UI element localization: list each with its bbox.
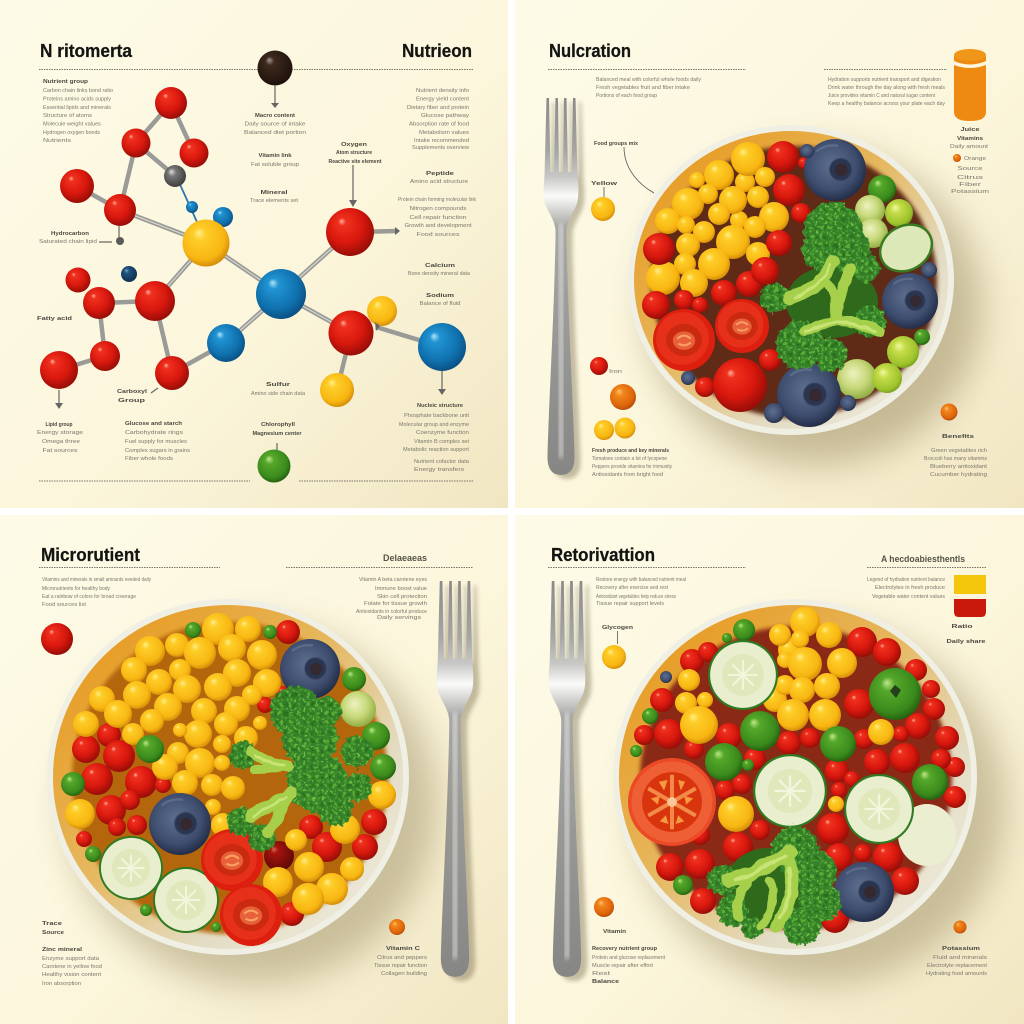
- text: top left: Micronutrients for healthy body: [42, 586, 110, 592]
- food: red tomatoes: [634, 627, 966, 933]
- text: jar labels: Citrus: [957, 175, 983, 181]
- text: top left block: Hydrogen oxygen bonds: [43, 130, 100, 136]
- text: bottom right: Electrolyte replacement: [927, 963, 987, 969]
- text: left labels: [37, 231, 148, 404]
- food: yellow peppers: [646, 142, 789, 297]
- icon: red ball: [41, 623, 73, 655]
- text: right middle labels: Balance of fluid: [420, 301, 460, 307]
- text: bottom right block: Molecular group and enzyme: [399, 422, 469, 428]
- food: tomato slice: [628, 758, 716, 846]
- title right: Nutrieon: [402, 41, 472, 61]
- text: jar labels: Fiber: [959, 182, 981, 188]
- text: right middle labels: Growth and development: [404, 223, 472, 229]
- text: bottom right block: [399, 403, 470, 473]
- text: bottom right: [924, 434, 988, 478]
- text: bottom right: Green vegetables rich: [931, 448, 987, 454]
- text: bottom left: Source: [42, 930, 64, 936]
- text: right column: Glucose pathway: [421, 113, 469, 119]
- text: right middle labels: Calcium: [425, 263, 455, 269]
- dividers: [39, 566, 473, 568]
- text: bottom left: Enzyme support data: [42, 956, 100, 962]
- text: bottom right: Tissue repair function: [374, 963, 427, 969]
- text: small labels: [591, 181, 622, 375]
- text: bottom left block: Omega three: [42, 439, 80, 445]
- food: broccoli: [227, 686, 373, 852]
- label with yellow ball: Glycogen: [602, 625, 634, 631]
- text: top right: Hydration supports nutrient transport and digestion: [828, 77, 941, 83]
- bowl: [613, 599, 1005, 985]
- dividers: [39, 70, 473, 481]
- food: broccoli: [760, 202, 886, 372]
- text: bottom right: Blueberry antioxidant: [930, 464, 988, 470]
- text: top right: Vitamin A beta carotene eyes: [359, 577, 427, 583]
- text: center labels: Mineral: [260, 190, 288, 196]
- text: bottom right block: Phosphate backbone unit: [404, 413, 469, 419]
- text: top right: Legend of hydration nutrient balance: [867, 577, 945, 583]
- text: small labels: Yellow: [591, 181, 618, 187]
- food: blueberries: [681, 139, 938, 427]
- text: top left: [42, 577, 151, 608]
- text: center labels: Reactive site element: [328, 159, 382, 165]
- text: top right: Antioxidants in colorful produce: [356, 609, 427, 615]
- text: bottom left: Muscle repair after effort: [592, 963, 653, 969]
- text: right middle labels: [398, 171, 476, 307]
- panel background: [515, 515, 1024, 1024]
- food: yellow peppers: [65, 613, 396, 915]
- text: bottom left: Trace: [42, 921, 62, 927]
- icon: fork: [437, 581, 480, 981]
- icon: orange jar: [954, 49, 986, 121]
- text: center labels: Vitamin link: [258, 153, 292, 159]
- text: top right: Vegetable water content values: [872, 594, 945, 600]
- text: top left block: Nutrient group: [43, 79, 89, 85]
- text: bottom right: Fluid and minerals: [933, 955, 987, 961]
- text: right column: Energy yield content: [416, 96, 469, 102]
- text: bottom left: Iron absorption: [42, 981, 81, 987]
- text: bottom right block: Energy transfers: [414, 467, 464, 473]
- text: top left block: Molecule weight values: [43, 122, 101, 128]
- text: small labels: Iron: [609, 369, 622, 375]
- food: green peas: [630, 619, 948, 895]
- text: right column: Supplements overview: [412, 145, 469, 151]
- food: pale slice: [898, 804, 956, 866]
- text: bottom middle block: [125, 421, 190, 462]
- panel background: [0, 0, 508, 508]
- text: right column: Dietary fiber and protein: [407, 105, 469, 111]
- arrows and leaders: [55, 85, 446, 450]
- text: bottom left: Vitamin: [603, 929, 627, 935]
- right heading: Delaeaeas: [383, 553, 427, 563]
- text: top left: [596, 77, 701, 99]
- small foods: loose balls: [590, 187, 958, 440]
- text: center labels: Daily source of intake: [244, 122, 306, 128]
- text: bottom left: [592, 448, 672, 478]
- text: top left block: Structure of atoms: [43, 113, 92, 119]
- molecule bonds: [59, 103, 442, 390]
- text: bottom right: [374, 946, 427, 977]
- legend swatches: [954, 575, 986, 617]
- text: center labels: Amino side chain data: [251, 391, 306, 397]
- dividers: [548, 68, 947, 70]
- panel: nutrition bowl: [515, 0, 1024, 508]
- text: bottom right block: Coenzyme function: [416, 430, 469, 436]
- text: top left: [596, 577, 686, 607]
- text: legend labels: Ratio: [952, 624, 973, 630]
- text: top right: Juice provides vitamin C and natural sugar content: [828, 93, 935, 99]
- text: bottom right block: Nutrient cofactor data: [414, 459, 470, 465]
- text: top left: Balanced meal with colorful whole foods daily: [596, 77, 701, 83]
- title: Microrutient: [41, 545, 140, 565]
- text: bottom left: Balance: [592, 979, 619, 985]
- text: jar labels: Potassium: [951, 189, 990, 195]
- text: top left: Recovery after exercise and rest: [596, 585, 668, 591]
- text: top left: Food sources list: [42, 602, 86, 608]
- text: top right: [828, 77, 945, 107]
- text: right column: Absorption rate of food: [409, 122, 469, 128]
- text: left labels: Carboxyl: [117, 389, 148, 395]
- text: center labels: [244, 113, 382, 437]
- text: bottom left block: [37, 422, 83, 454]
- text: bottom middle block: Fuel supply for muscles: [125, 439, 187, 445]
- text: top left: Eat a rainbow of colors for broad coverage: [42, 594, 136, 600]
- text: jar labels: Orange: [964, 156, 986, 162]
- text: bottom right: Potassium: [942, 946, 980, 952]
- molecule atoms: [40, 50, 466, 482]
- text: top left: Antioxidant vegetables help reduce stress: [596, 594, 676, 600]
- text: center labels: Trace elements set: [250, 198, 298, 204]
- text: jar labels: Juice: [960, 127, 980, 133]
- food: blueberries: [149, 639, 340, 855]
- text: right column: [407, 88, 469, 151]
- food: small blueberry: [660, 671, 672, 683]
- text: bottom middle block: Fiber whole foods: [125, 456, 173, 462]
- text: left labels: Group: [118, 398, 146, 404]
- text: right middle labels: Protein chain forming molecular link: [398, 197, 476, 203]
- icon: orange dot: [389, 919, 405, 935]
- food: sliced tomatoes: [201, 829, 282, 946]
- text: bottom right block: Nucleic structure: [417, 403, 463, 409]
- text: top right: Skin cell protection: [377, 594, 427, 600]
- right heading: A hecdoabiesthentls: [881, 554, 965, 564]
- text: bottom left: [592, 929, 665, 985]
- label and leader: Food groups mix: [594, 141, 639, 147]
- food: cucumber slices: [708, 640, 914, 844]
- text: top left block: [43, 79, 113, 144]
- dividers: [548, 566, 986, 568]
- title: Nulcration: [549, 41, 631, 61]
- text: top right: Immune boost value: [375, 586, 427, 592]
- food: green peas: [61, 622, 396, 932]
- text: bottom right: Citrus and peppers: [377, 955, 427, 961]
- text: bottom right block: Vitamin B complex set: [414, 439, 469, 445]
- text: top right: [867, 577, 945, 600]
- text: left labels: Fatty acid: [37, 316, 72, 322]
- food: pale pepper: [340, 691, 376, 727]
- food: broccoli: [707, 826, 841, 945]
- text: bottom left block: Lipid group: [46, 422, 73, 428]
- text: center labels: Magnesium center: [252, 431, 302, 437]
- text: top left block: Nutrients: [43, 138, 71, 144]
- food: red tomatoes: [72, 620, 387, 926]
- text: bottom left block: Fat sources: [42, 448, 78, 454]
- text: bottom left block: Energy storage: [37, 430, 83, 436]
- text: right middle labels: Sodium: [426, 293, 454, 299]
- text: bottom middle block: Glucose and starch: [125, 421, 183, 427]
- text: right middle labels: Bone density mineral data: [408, 271, 471, 277]
- text: right middle labels: Food sources: [416, 232, 460, 238]
- food: cucumber slices: [99, 836, 219, 933]
- title left: N ritomerta: [40, 41, 133, 61]
- text: top left block: Essential lipids and minerals: [43, 105, 111, 111]
- text: top right: Daily servings: [377, 615, 421, 621]
- text: top right: Drink water through the day along with fresh meals: [828, 85, 945, 91]
- text: bottom right: Hydrating food amounts: [926, 971, 987, 977]
- text: center labels: Sulfur: [266, 382, 291, 388]
- text: right middle labels: Amino acid structure: [410, 179, 468, 185]
- panel background: [515, 0, 1024, 508]
- text: top left: Vitamins and minerals in small amounts needed daily: [42, 577, 151, 583]
- food: yellow peppers: [675, 607, 894, 832]
- text: bottom right: Collagen building: [381, 971, 427, 977]
- text: top left: Tissue repair support levels: [596, 601, 664, 607]
- text: top right: Keep a healthy balance across your plate each day: [828, 101, 945, 107]
- food: dark cherry: [264, 841, 294, 871]
- text: jar labels: Vitamins: [957, 136, 983, 142]
- text: left labels: Hydrocarbon: [51, 231, 90, 237]
- text: center labels: Balanced diet portion: [244, 130, 306, 136]
- text: top left block: Carbon chain links bond ratio: [43, 88, 113, 94]
- panel: molecule diagram: [0, 0, 508, 508]
- text: top left: Portions of each food group: [596, 93, 657, 99]
- panel: restoration bowl: [515, 515, 1024, 1024]
- small foods: dots: [594, 897, 966, 934]
- food: pepper center: [890, 685, 901, 698]
- text: bottom left: Fresh produce and key minerals: [592, 448, 669, 454]
- label and leader: [594, 141, 654, 193]
- panel: micronutrient bowl: [0, 515, 508, 1024]
- text: bottom left: Protein and glucose replacement: [592, 955, 665, 961]
- text: left labels: Saturated chain lipid: [39, 239, 97, 245]
- text: jar labels: [950, 127, 990, 195]
- text: bottom left: Recovery nutrient group: [592, 946, 658, 952]
- text: bottom left: Zinc mineral: [42, 947, 83, 953]
- text: bottom left: Peppers provide vitamins for immunity: [592, 464, 672, 470]
- text: legend labels: Daily share: [946, 639, 986, 645]
- text: top left block: Proteins amino acids supply: [43, 96, 111, 102]
- text: bottom left: Antioxidants from bright food: [592, 472, 663, 478]
- text: right column: Nutrient density info: [416, 88, 469, 94]
- bowl: [628, 125, 982, 465]
- text: bottom right: Cucumber hydrating: [930, 472, 987, 478]
- food: blueberry: [834, 862, 894, 922]
- icon: fork: [549, 581, 592, 981]
- text: center labels: Fat soluble group: [251, 162, 299, 168]
- text: center labels: Oxygen: [341, 142, 368, 148]
- icon: orange dot: [953, 154, 961, 162]
- text: right middle labels: Peptide: [426, 171, 454, 177]
- text: bottom right block: Metabolic reaction support: [403, 447, 469, 453]
- text: bottom right: Broccoli has many vitamins: [924, 456, 987, 462]
- food: greens and cucumber: [837, 175, 940, 399]
- text: center labels: Atom structure: [336, 150, 372, 156]
- bowl: [47, 599, 437, 985]
- text: bottom left: Healthy vision content: [42, 972, 102, 978]
- text: right column: Metabolism values: [419, 130, 469, 136]
- text: center labels: Macro content: [255, 113, 295, 119]
- text: top left: Restore energy with balanced nutrient meal: [596, 577, 686, 583]
- text: top right: Electrolytes in fresh produce: [875, 585, 945, 591]
- text: top left: Fresh vegetables fruit and fiber intake: [596, 85, 690, 91]
- label with yellow ball: [602, 625, 634, 669]
- text: legend labels: [946, 624, 986, 645]
- text: bottom right: [926, 946, 987, 977]
- text: bottom left: Carotene in yellow food: [42, 964, 102, 970]
- food: red tomatoes: [642, 141, 811, 412]
- food: sliced tomatoes: [653, 299, 769, 371]
- text: right column: Intake recommended: [414, 138, 469, 144]
- text: bottom left: Rest: [592, 971, 611, 977]
- text: right middle labels: Nitrogen compounds: [410, 206, 467, 212]
- panel background: [0, 515, 508, 1024]
- text: center labels: Chlorophyll: [261, 422, 296, 428]
- text: right middle labels: Cell repair function: [410, 215, 466, 221]
- text: top right: Folate for tissue growth: [364, 601, 427, 607]
- text: bottom middle block: Carbohydrate rings: [125, 430, 183, 436]
- text: bottom left: [42, 921, 102, 987]
- text: bottom left: Tomatoes contain a lot of lycopene: [592, 456, 667, 462]
- text: jar labels: Daily amount: [950, 144, 989, 150]
- icon: fork: [544, 98, 584, 479]
- text: jar labels: Source: [958, 166, 982, 172]
- text: top right: [356, 577, 427, 621]
- title: Retorivattion: [551, 545, 655, 565]
- text: bottom middle block: Complex sugars in grains: [125, 448, 190, 454]
- text: bottom right: Benefits: [942, 434, 974, 440]
- text: bottom right: Vitamin C: [386, 946, 420, 952]
